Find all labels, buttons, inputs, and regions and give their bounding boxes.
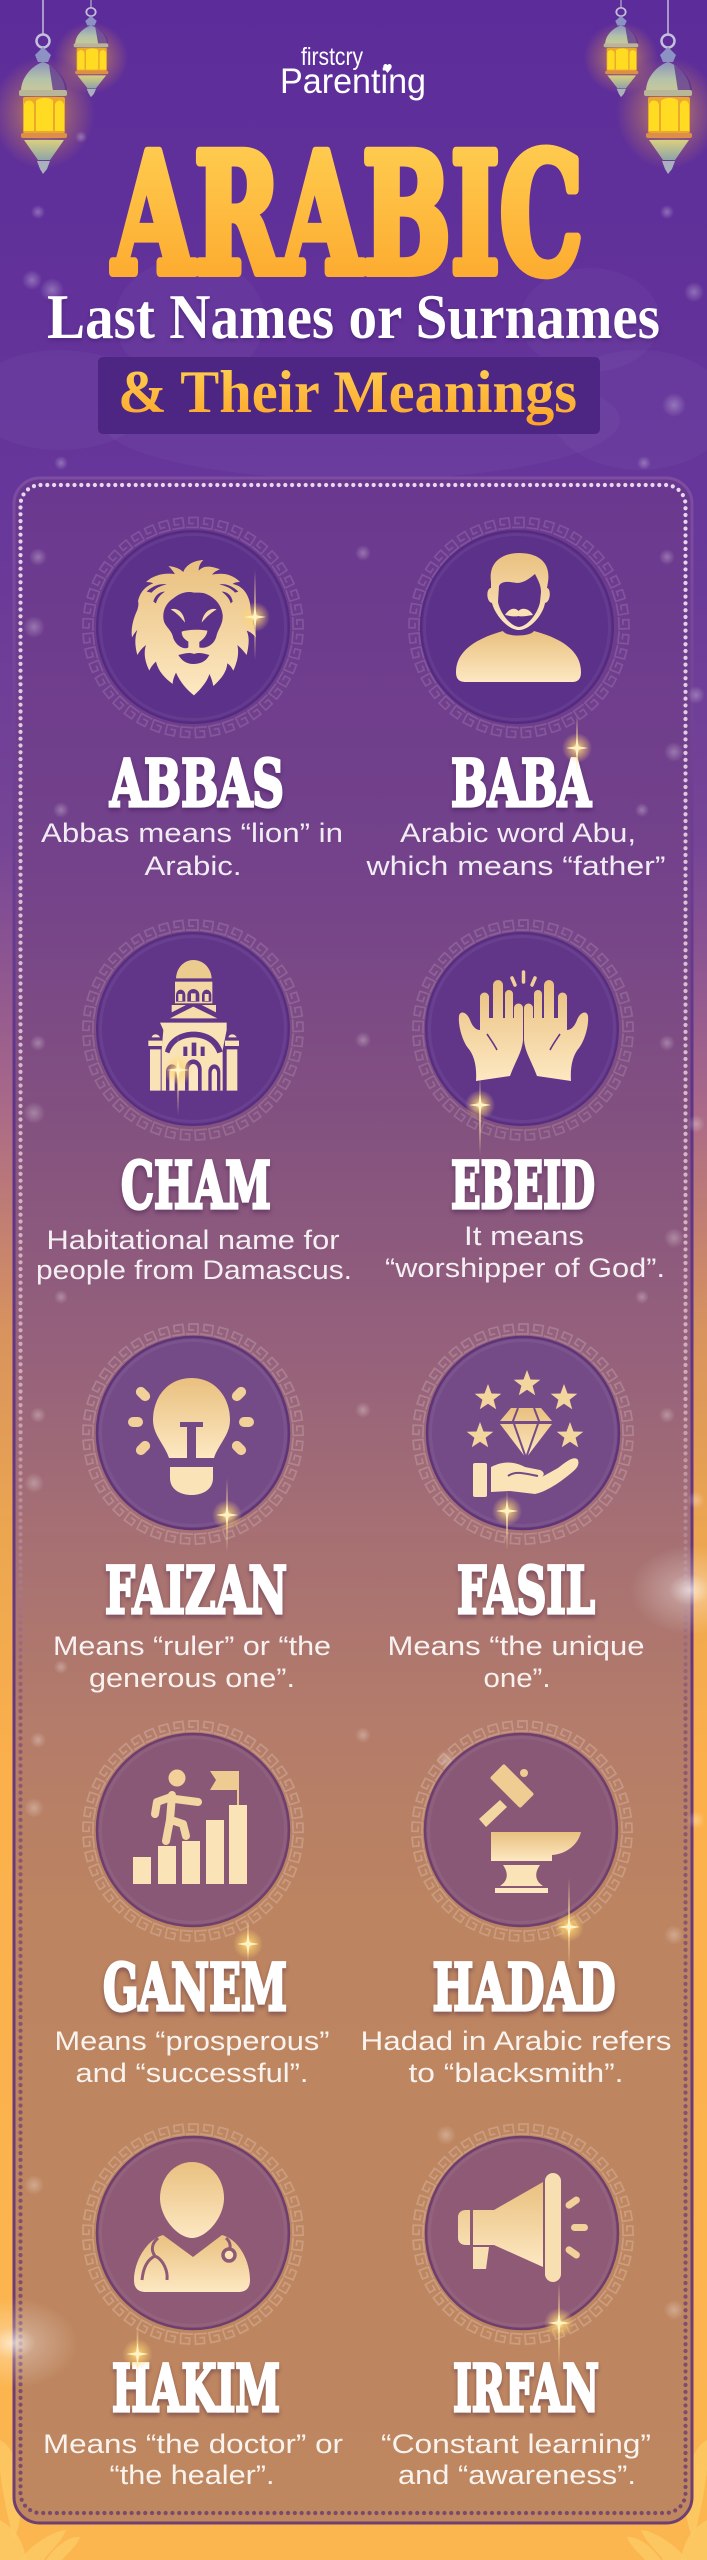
background clouds (0, 258, 707, 480)
icon: megaphone (458, 2173, 588, 2282)
description: FAIZAN (53, 1631, 331, 1693)
description: GANEM (54, 2026, 330, 2088)
description: IRFAN: and “awareness”. (398, 2460, 636, 2490)
card: IRFAN (381, 2124, 651, 2490)
card: ABBAS (41, 518, 343, 881)
icon: person climbing steps to flag (133, 1770, 247, 1884)
name: IRFAN: IRFAN (453, 2351, 599, 2427)
logo: firstcry parenting (280, 43, 426, 101)
icon: light bulb (128, 1378, 254, 1495)
medallion: FAIZAN (83, 1324, 303, 1544)
medallion: GANEM (83, 1721, 303, 1941)
description: ABBAS (41, 818, 343, 881)
description: ABBAS: Arabic. (144, 851, 242, 881)
icon: hand holding diamond and stars (467, 1370, 583, 1497)
description: IRFAN: “Constant learning” (381, 2429, 651, 2459)
description: ABBAS: Abbas means “lion” in (41, 818, 343, 848)
name: EBEID: EBEID (451, 1148, 595, 1224)
icon: lion (132, 560, 256, 695)
description: BABA: which means “father” (365, 851, 666, 881)
icon: doctor with stethoscope (134, 2162, 250, 2292)
description: FAIZAN: generous one”. (89, 1663, 295, 1693)
name: FASIL: FASIL (457, 1553, 595, 1629)
lantern: left large (0, 0, 95, 174)
lantern: right large (616, 0, 707, 174)
description: CHAM: people from Damascus. (36, 1255, 352, 1285)
medallion: ABBAS (83, 518, 303, 738)
description: HAKIM (43, 2429, 343, 2490)
description: FASIL: one”. (484, 1663, 550, 1693)
name: BABA: BABA (451, 746, 592, 822)
lantern: left small (54, 0, 128, 97)
decorative leaves at bottom (0, 2440, 707, 2560)
lantern: right small (584, 0, 658, 97)
card: GANEM (54, 1721, 330, 2088)
medallion: BABA (409, 518, 629, 738)
description: GANEM: Means “prosperous” (54, 2026, 330, 2056)
description: HADAD: Hadad in Arabic refers (360, 2026, 672, 2056)
description: HAKIM: Means “the doctor” or (43, 2429, 343, 2459)
description: CHAM (36, 1225, 352, 1285)
name: HAKIM: HAKIM (112, 2351, 280, 2427)
heading: Last Names or Surnames: Last Names or Surnames (47, 282, 660, 352)
description: HADAD: to “blacksmith”. (408, 2058, 624, 2088)
description: FASIL: Means “the unique (388, 1631, 644, 1661)
description: IRFAN (381, 2429, 651, 2490)
gold sparkles (122, 570, 592, 2377)
subtitle band: & Their Meanings: & Their Meanings (118, 359, 577, 425)
medallion: HAKIM (83, 2124, 303, 2344)
name: CHAM: CHAM (121, 1148, 271, 1224)
medallion: EBEID (413, 920, 633, 1140)
description: EBEID: “worshipper of God”. (385, 1253, 665, 1283)
description: EBEID (385, 1221, 665, 1283)
card: HAKIM (43, 2124, 343, 2490)
card: FAIZAN (53, 1324, 331, 1693)
icon: mosque building (148, 960, 239, 1091)
description: BABA (365, 818, 666, 881)
description: BABA: Arabic word Abu, (400, 818, 636, 848)
description: HADAD (360, 2026, 672, 2088)
name: FAIZAN: FAIZAN (105, 1553, 287, 1629)
description: FASIL (388, 1631, 644, 1693)
card: EBEID (385, 920, 665, 1283)
icon: hammer and anvil (479, 1764, 581, 1893)
name: ABBAS: ABBAS (109, 746, 284, 822)
name: GANEM: GANEM (103, 1950, 287, 2026)
description: EBEID: It means (464, 1221, 584, 1251)
medallion: IRFAN (413, 2124, 633, 2344)
medallion: HADAD (412, 1721, 632, 1941)
card: BABA (365, 518, 666, 881)
card: HADAD (360, 1721, 672, 2088)
icon: man with moustache (456, 553, 581, 682)
medallion: CHAM (83, 920, 303, 1140)
card: FASIL (388, 1324, 644, 1693)
logo: firstcry parenting: firstcry (301, 43, 363, 71)
description: FAIZAN: Means “ruler” or “the (53, 1631, 331, 1661)
medallion: FASIL (413, 1324, 633, 1544)
description: GANEM: and “successful”. (76, 2058, 308, 2088)
icon: praying hands (459, 972, 588, 1081)
logo: firstcry parenting: Parenting (280, 62, 426, 101)
name: HADAD: HADAD (432, 1950, 616, 2026)
panel: names list (14, 478, 692, 2523)
card: CHAM (36, 920, 352, 1285)
lens flares (0, 1545, 707, 2388)
description: HAKIM: “the healer”. (110, 2460, 274, 2490)
description: CHAM: Habitational name for (46, 1225, 340, 1255)
